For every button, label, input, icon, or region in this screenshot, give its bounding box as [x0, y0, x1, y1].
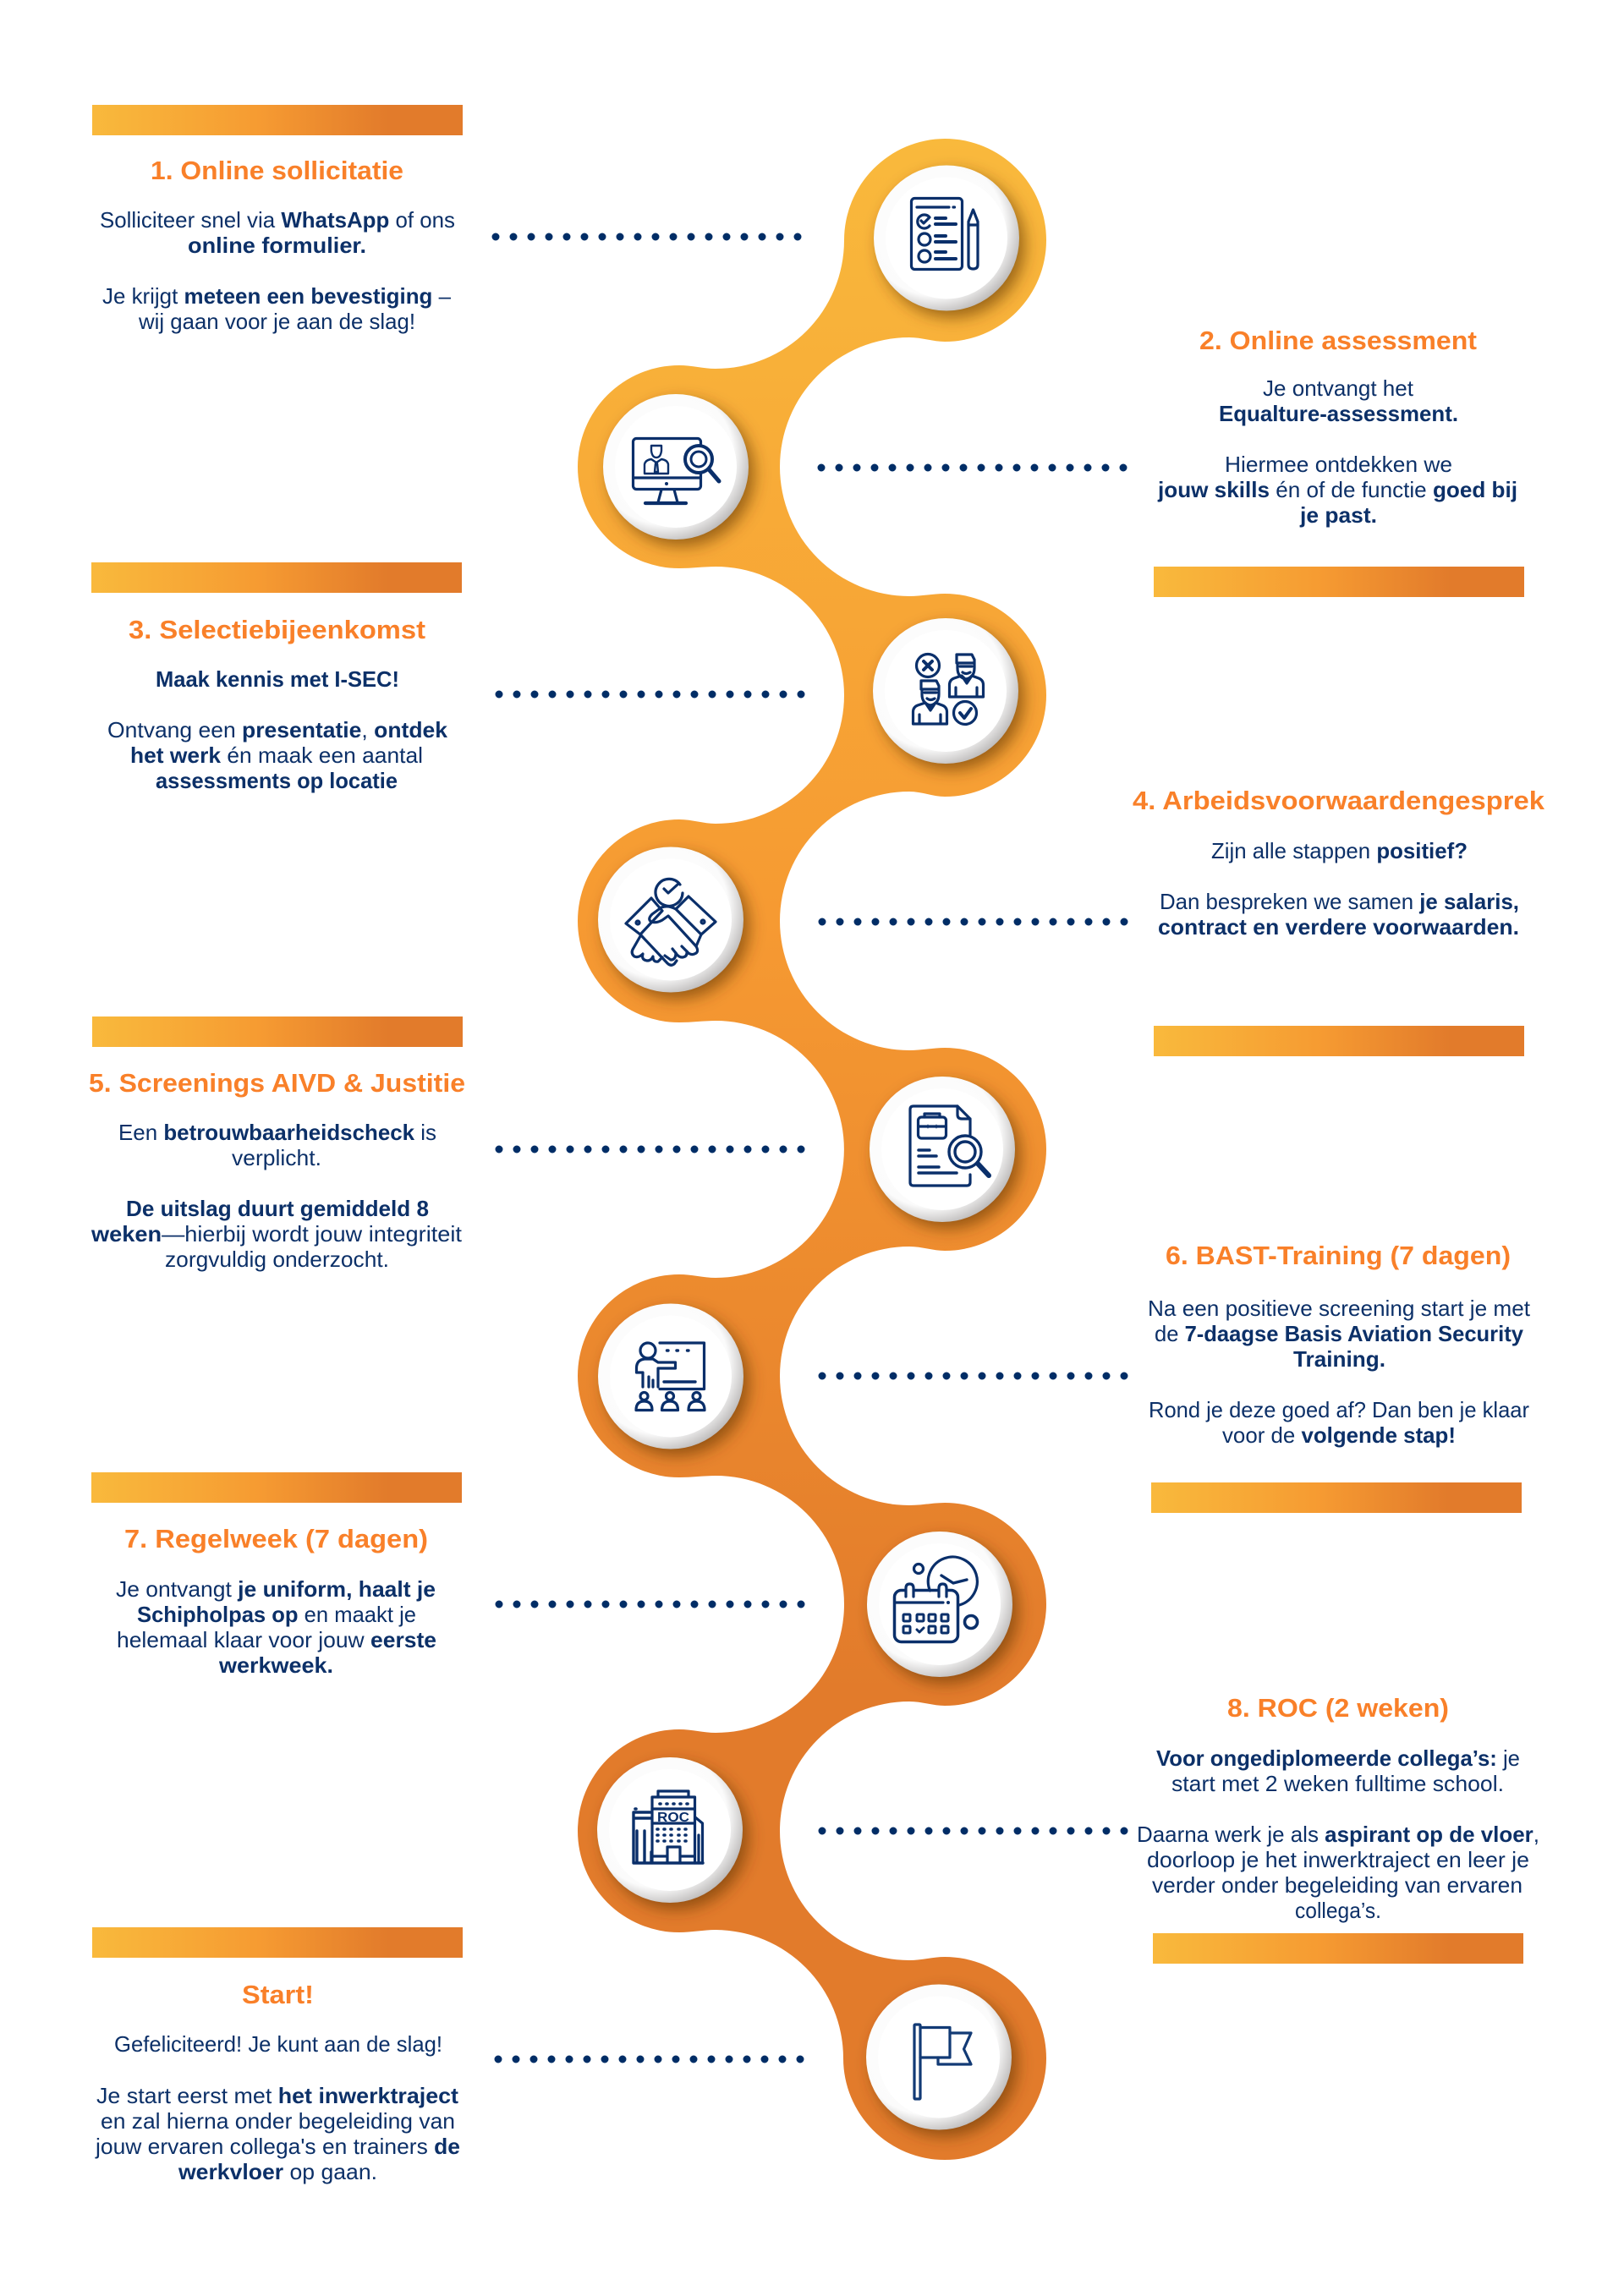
dotted connector 5 [499, 1145, 807, 1153]
bar [1154, 567, 1524, 597]
text block: collega’s. [1295, 1898, 1381, 1923]
text block [1157, 375, 1517, 528]
text block: Je start eerst met het inwerktraject [96, 2083, 458, 2108]
text block: wij gaan voor je aan de slag! [138, 309, 415, 334]
heading: 6. BAST-Training (7 dagen) [1166, 1241, 1511, 1270]
bar [92, 1927, 463, 1958]
panel: step 7 [91, 1472, 462, 1678]
text block: Maak kennis met I-SEC! [156, 666, 399, 692]
dotted connector 4 [822, 918, 1130, 925]
text block: helemaal klaar voor jouw eerste [117, 1627, 436, 1652]
text block: contract en verdere voorwaarden. [1158, 914, 1519, 940]
text block: Equalture-assessment. [1219, 401, 1458, 426]
node 8: ROC building icon: ROC [657, 1811, 689, 1825]
dotted connector 6 [822, 1372, 1130, 1380]
node 2: monitor icon [603, 394, 754, 546]
panel: step 1 [92, 105, 463, 334]
bar [1154, 1026, 1524, 1056]
text block: werkweek. [218, 1652, 333, 1678]
node 3: candidates icon [873, 618, 1024, 770]
dotted connector 9 [498, 2055, 806, 2063]
bar [91, 1472, 462, 1503]
heading: 4. Arbeidsvoorwaardengesprek [1133, 786, 1545, 815]
text block: het werk én maak een aantal [130, 743, 423, 768]
panel: step 3 [91, 562, 462, 793]
text block: verder onder begeleiding van ervaren [1152, 1872, 1522, 1898]
heading: 3. Selectiebijeenkomst [129, 615, 425, 644]
text block [1137, 1745, 1539, 1923]
text block: voor de volgende stap! [1222, 1422, 1456, 1448]
text block: Voor ongediplomeerde collega’s: je [1156, 1745, 1520, 1771]
text block [107, 666, 448, 793]
text block: Training. [1293, 1346, 1385, 1372]
text block: Daarna werk je als aspirant op de vloer, [1137, 1822, 1539, 1847]
serpentine orange track [578, 139, 1046, 2160]
text block: Na een positieve screening start je met [1148, 1296, 1531, 1321]
node 4: handshake icon [598, 847, 749, 1000]
text block: Zijn alle stappen positief? [1211, 838, 1468, 863]
text block: Rond je deze goed af? Dan ben je klaar [1149, 1397, 1529, 1422]
text block: assessments op locatie [156, 768, 398, 793]
text block [100, 207, 455, 334]
dotted connector 2 [821, 463, 1129, 472]
node 8: ROC building icon [597, 1757, 749, 1910]
text block: Gefeliciteerd! Je kunt aan de slag! [114, 2031, 442, 2057]
heading: Start! [242, 1980, 314, 2009]
text block: Je ontvangt je uniform, haalt je [116, 1576, 436, 1602]
text block: Hiermee ontdekken we [1225, 452, 1452, 477]
text block: Schipholpas op en maakt je [137, 1602, 416, 1627]
bar [92, 1016, 463, 1047]
heading: 7. Regelweek (7 dagen) [124, 1524, 428, 1553]
text block: werkvloer op gaan. [178, 2159, 377, 2184]
text block [1158, 838, 1519, 940]
text block: je past. [1299, 502, 1377, 528]
text block: de 7-daagse Basis Aviation Security [1155, 1321, 1524, 1346]
text block: zorgvuldig onderzocht. [165, 1247, 389, 1272]
text block: en zal hierna onder begeleiding van [101, 2108, 455, 2134]
text block: jouw ervaren collega's en trainers de [95, 2134, 460, 2159]
panel: step 4 [1133, 786, 1545, 1056]
text block: De uitslag duurt gemiddeld 8 [126, 1196, 429, 1221]
bar [92, 105, 463, 135]
dotted connector 8 [822, 1827, 1130, 1835]
heading: 2. Online assessment [1199, 326, 1477, 355]
text block: Een betrouwbaarheidscheck is [118, 1120, 436, 1145]
panel: step 5 [89, 1016, 465, 1272]
node 1: checklist icon [874, 166, 1025, 318]
panel: step 6 [1148, 1241, 1531, 1513]
node 9: flag icon [866, 1984, 1018, 2136]
text block: Solliciteer snel via WhatsApp of ons [100, 207, 455, 233]
text block [95, 2031, 460, 2184]
panel: step 2 [1154, 326, 1524, 597]
text block [91, 1120, 463, 1272]
bar [1153, 1933, 1523, 1964]
text block: Dan bespreken we samen je salaris, [1160, 889, 1519, 914]
heading: 8. ROC (2 weken) [1227, 1693, 1449, 1723]
node 5: document search icon [870, 1077, 1021, 1229]
panel: step 8 [1137, 1693, 1539, 1964]
node 7: calendar and clock icon [867, 1532, 1018, 1684]
text block [1148, 1296, 1531, 1448]
dotted connector 1 [496, 233, 804, 240]
text block: Ontvang een presentatie, ontdek [107, 717, 448, 743]
dotted connector 7 [499, 1600, 807, 1608]
text block: Je krijgt meteen een bevestiging – [102, 283, 452, 309]
panel: start [92, 1927, 463, 2184]
text block: doorloop je het inwerktraject en leer je [1147, 1847, 1529, 1872]
dotted connector 3 [499, 690, 807, 699]
text block: Je ontvangt het [1263, 375, 1414, 401]
node 6: training icon [598, 1304, 749, 1456]
text block [116, 1576, 436, 1678]
text block: verplicht. [232, 1145, 321, 1170]
bar [1151, 1482, 1522, 1513]
text block: weken—hierbij wordt jouw integriteit [91, 1221, 463, 1247]
bar [91, 562, 462, 593]
text block: online formulier. [188, 233, 366, 258]
heading: 5. Screenings AIVD & Justitie [89, 1068, 465, 1098]
text block: jouw skills én of de functie goed bij [1157, 477, 1517, 502]
text block: start met 2 weken fulltime school. [1171, 1771, 1504, 1796]
heading: 1. Online sollicitatie [151, 156, 403, 185]
